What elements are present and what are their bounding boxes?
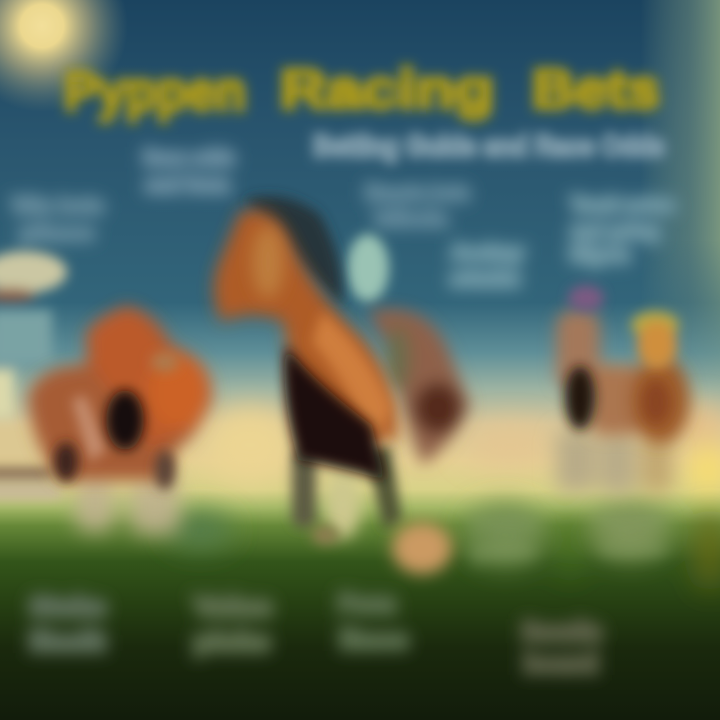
grass text block 3: lines <box>340 624 408 654</box>
grass caption: row 1: Payouts <box>595 508 667 533</box>
illustration: right horses <box>556 285 690 494</box>
legs <box>292 445 402 530</box>
sky text block 1 <box>143 145 235 197</box>
sky text block 3 <box>365 180 470 231</box>
grass text block 1 <box>30 591 106 656</box>
left horse: body <box>28 305 212 480</box>
sky text block 4: Jockey <box>450 240 525 265</box>
horizon glow <box>204 405 720 496</box>
grass caption: row 1: Odds <box>470 510 540 535</box>
grass text block 3 <box>338 588 408 654</box>
right horses: legs <box>556 430 672 494</box>
grass text block 1: limit <box>30 626 104 656</box>
right edge light <box>648 0 720 355</box>
pale gap between legs <box>325 471 361 539</box>
title: Pyppen <box>64 59 246 122</box>
sky text block 5 <box>570 192 675 267</box>
front hoof <box>392 522 452 574</box>
left horse: dark legs <box>54 442 175 490</box>
sky text block 3: trifecta <box>375 206 448 231</box>
grass caption: row 1: table <box>600 535 666 560</box>
sky text block 5: Track notes <box>570 192 675 217</box>
left horse: light flank <box>72 395 106 462</box>
icon: white rail canopy <box>0 251 67 500</box>
title <box>64 57 660 122</box>
sky text block 5: and going <box>570 218 660 243</box>
right horses: dark chest <box>565 366 595 430</box>
grass text block 3: Form <box>338 588 396 618</box>
head highlight <box>252 226 284 298</box>
right horses: caps <box>568 285 679 369</box>
left horse: pale lower legs <box>75 470 180 535</box>
head and neck <box>214 209 398 440</box>
sky text block 4 <box>450 240 525 291</box>
right horses: dark belly <box>642 380 670 424</box>
grass text block 4 <box>522 616 602 678</box>
sky text block 2: Win bets <box>12 193 104 218</box>
sky text block 3: Exacta bets <box>365 180 470 205</box>
title: Racing <box>280 57 494 120</box>
illustration: left horse <box>28 305 212 535</box>
sky text block 1: and form <box>145 172 230 197</box>
sky text block 2 <box>12 193 104 245</box>
chest <box>284 345 385 480</box>
grass text block 4: board <box>524 648 598 678</box>
grass caption: row 1: guide <box>470 538 536 563</box>
grass text block 2: picks <box>194 626 270 656</box>
left horse: dark chest <box>106 390 144 450</box>
icon: sun glow <box>0 0 128 112</box>
neck highlight <box>312 312 392 445</box>
hindquarters <box>368 309 470 465</box>
sky text block 5: tips <box>570 242 630 267</box>
sky text block 2: place <box>20 220 94 245</box>
mane <box>245 196 342 305</box>
left horse: saddle patch <box>151 352 179 372</box>
grass text block 4: Results <box>522 616 602 646</box>
title: Bets <box>532 57 660 120</box>
grass light patches <box>168 502 720 590</box>
right horses: bodies <box>556 310 690 444</box>
sky text block 4: stats <box>450 266 520 291</box>
jockey silk <box>347 234 389 302</box>
grass text block 2 <box>194 591 272 656</box>
grass text block 2: Value <box>194 591 272 621</box>
grass text block 1: Stake <box>30 591 106 621</box>
grass caption: row 1 <box>470 508 667 563</box>
illustration: centre horse <box>214 196 470 574</box>
back hoof <box>311 525 339 545</box>
sky text block 1: Race odds <box>143 145 235 170</box>
